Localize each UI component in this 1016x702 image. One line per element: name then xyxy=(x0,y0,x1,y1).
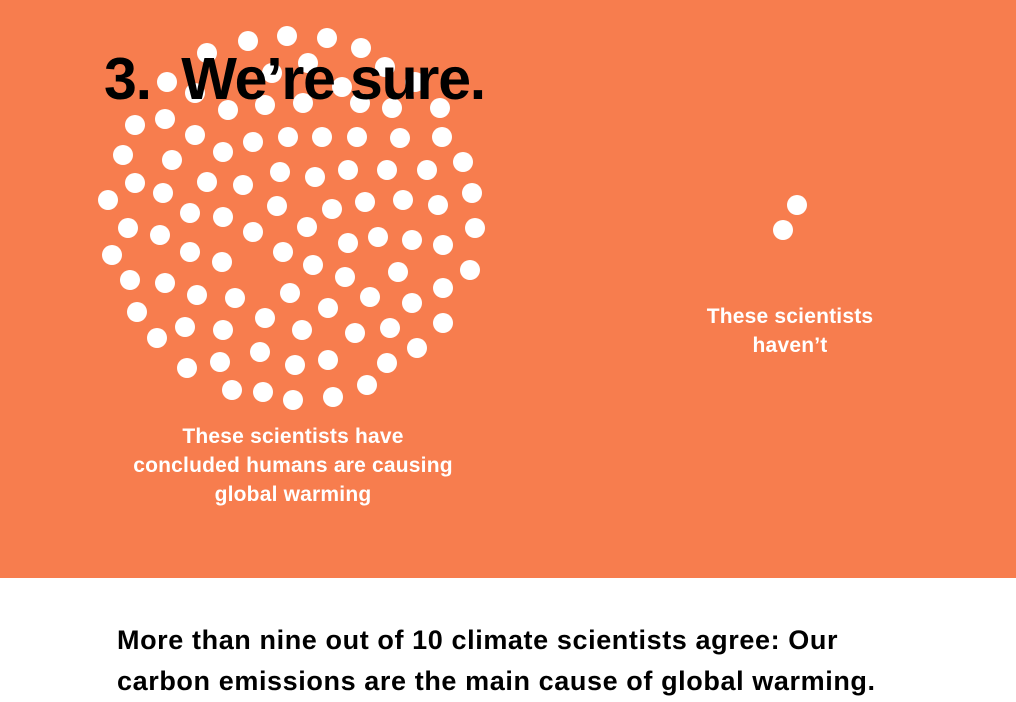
label: haven't xyxy=(706,305,873,357)
label: agree: These scientists have xyxy=(182,425,404,448)
label: haven't: haven’t xyxy=(753,334,827,357)
label: agree: concluded humans are causing xyxy=(133,454,453,477)
text block: conclusion xyxy=(117,625,876,696)
label: haven't: These scientists xyxy=(707,305,873,328)
chart: dots of scientists who haven't xyxy=(773,195,807,240)
label: agree: global warming xyxy=(215,483,371,506)
title: 3. We’re sure. xyxy=(104,46,485,112)
text block: conclusion: More than nine out of 10 climate scientists agree: Our xyxy=(117,625,838,655)
label: agree xyxy=(133,425,453,506)
text block: conclusion: carbon emissions are the main cause of global warming. xyxy=(117,666,876,696)
